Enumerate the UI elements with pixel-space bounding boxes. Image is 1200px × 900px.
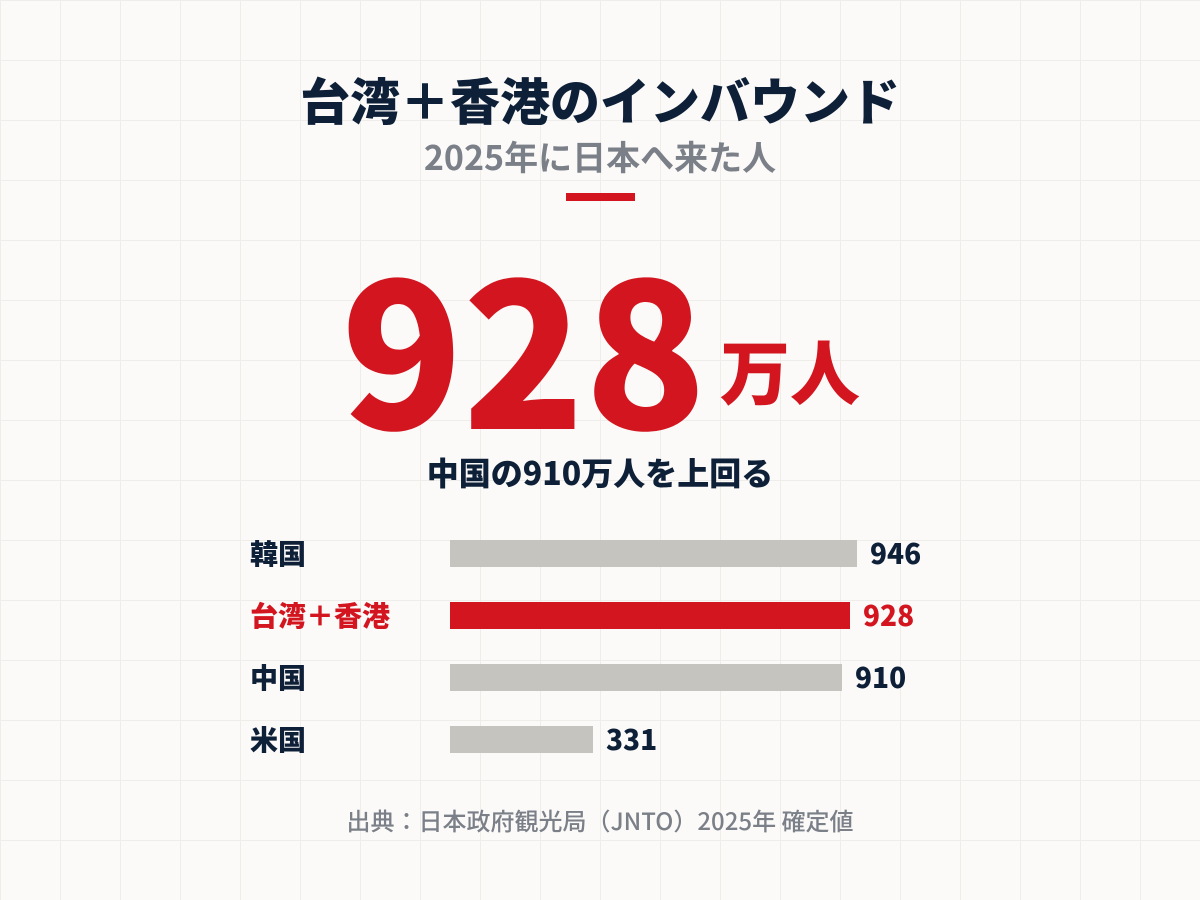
title: 台湾＋香港のインバウンド: [300, 63, 900, 135]
row: 台湾＋香港: 台湾＋香港: [250, 595, 390, 635]
row: 米国: 331: [606, 719, 657, 759]
row: 韓国: 韓国: [250, 533, 306, 573]
row: 台湾＋香港: 928: [863, 595, 914, 635]
row: 韓国: 946: [870, 533, 921, 573]
comparison note: 中国の910万人を上回る: [427, 449, 773, 495]
row: 中国: 中国: [250, 657, 306, 697]
bar chart: [250, 533, 921, 759]
source note: 出典：日本政府観光局（JNTO）2025年 確定値: [346, 802, 854, 837]
unit: 万人: 万人: [720, 319, 860, 420]
row: 台湾＋香港: [250, 595, 914, 635]
accent rule: [566, 193, 635, 201]
subtitle: 2025年に日本へ来た人: [424, 131, 776, 180]
big number: 928: 928: [341, 197, 706, 487]
row: 韓国: [250, 533, 921, 573]
row: 米国: 米国: [250, 719, 306, 759]
row: 米国: [250, 719, 657, 759]
row: 中国: 910: [855, 657, 906, 697]
row: 中国: [250, 657, 906, 697]
